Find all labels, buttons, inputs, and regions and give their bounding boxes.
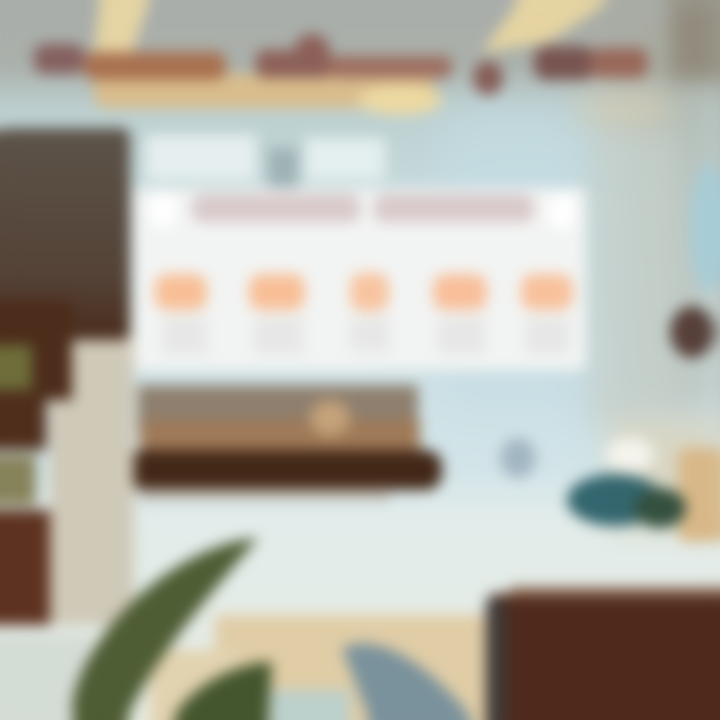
board hanger [268, 148, 298, 188]
panel: infographic board [134, 135, 586, 370]
floor rug [150, 615, 490, 720]
corner glow left [149, 192, 177, 228]
foreground brown armchair [486, 587, 720, 720]
corner glow right [548, 194, 576, 230]
orange icon 2 [249, 274, 305, 310]
shelf with items [128, 385, 442, 500]
left foreground dark shelf [0, 128, 134, 720]
foreground chair blue [270, 643, 474, 720]
title band glow [94, 74, 675, 128]
orange icon 4 [433, 274, 487, 310]
title: blurred heading [34, 34, 648, 95]
ceiling light strips [94, 0, 612, 52]
orange icon 3 [350, 273, 389, 311]
orange icon 5 [521, 274, 573, 310]
sofa with cushions right [567, 420, 720, 542]
board background [134, 188, 586, 370]
upper window glow right [305, 138, 385, 180]
small wall object [500, 438, 536, 478]
column captions [162, 318, 570, 354]
board heading [192, 194, 534, 222]
orange icon 1 [155, 274, 207, 310]
foreground plant [72, 538, 272, 720]
upper window glow [146, 135, 256, 180]
wall mirror right [670, 164, 720, 358]
